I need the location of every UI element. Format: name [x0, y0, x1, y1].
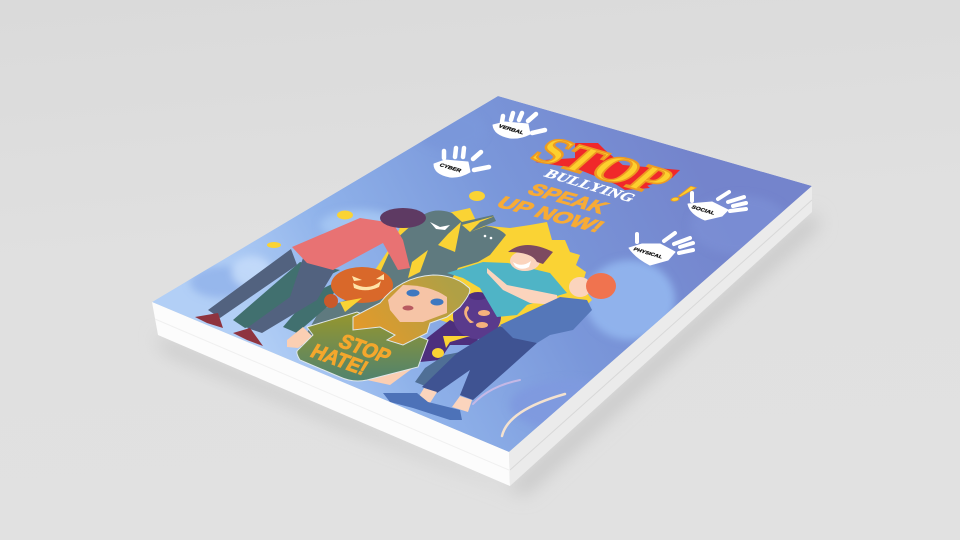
shirt slogan — [310, 334, 392, 376]
shirt slogan: HATE! — [306, 341, 372, 380]
man torso — [447, 262, 567, 317]
hand: verbal — [493, 113, 545, 138]
yellow paint dots — [267, 191, 485, 248]
boy torso — [500, 297, 592, 343]
pink person hair — [380, 208, 426, 228]
label verbal: VERBAL — [497, 124, 525, 136]
yellow splash — [376, 208, 592, 328]
purple monster — [420, 292, 501, 362]
hand: physical — [629, 233, 693, 265]
grey monster shadows — [301, 210, 506, 346]
poster background — [152, 96, 812, 452]
stop title: STOP — [520, 129, 686, 202]
teal shirt man — [447, 245, 567, 317]
brush strokes — [473, 380, 565, 436]
watercolor blobs — [190, 110, 790, 430]
girl hair — [353, 275, 470, 345]
exclamation mark: ! — [659, 181, 706, 207]
boy legs — [422, 326, 537, 400]
hand: social — [688, 192, 746, 220]
man head — [510, 251, 540, 271]
dark green shadow legs — [233, 262, 340, 333]
boy head — [569, 277, 588, 297]
boy shoes — [383, 393, 462, 420]
girl eyes — [406, 290, 420, 296]
boy hair — [586, 273, 616, 299]
bullying subtitle: BULLYING — [540, 168, 640, 205]
pink person legs — [208, 249, 297, 318]
paper stack edges — [152, 186, 812, 486]
shirt slogan: STOP — [334, 331, 395, 368]
girl mouth — [402, 306, 414, 310]
girl t-shirt — [297, 312, 428, 381]
label physical: PHYSICAL — [632, 247, 664, 260]
label cyber: CYBER — [438, 163, 463, 174]
ginger boy — [383, 273, 616, 420]
red x behind stop — [535, 143, 680, 190]
hand: cyber — [434, 148, 489, 177]
grey-blue shadow under boy — [415, 352, 458, 386]
speak up now slogan: SPEAK — [523, 180, 614, 217]
poster — [152, 96, 812, 452]
pink person near leg — [247, 258, 335, 333]
boy ankles — [418, 388, 472, 412]
crying girl with shirt — [287, 275, 470, 385]
man hair — [508, 245, 553, 264]
girl arms — [287, 327, 413, 385]
speak up now slogan: UP NOW! — [492, 193, 610, 236]
mockup scene — [152, 96, 818, 494]
label social: SOCIAL — [690, 205, 716, 216]
man pointing arm — [487, 268, 558, 305]
pink person torso — [292, 218, 410, 270]
stack shadow — [155, 212, 820, 495]
person in pink from behind — [195, 208, 426, 346]
pumpkin monster — [324, 267, 393, 312]
pink person shoes — [195, 313, 263, 346]
girl face — [388, 285, 447, 322]
